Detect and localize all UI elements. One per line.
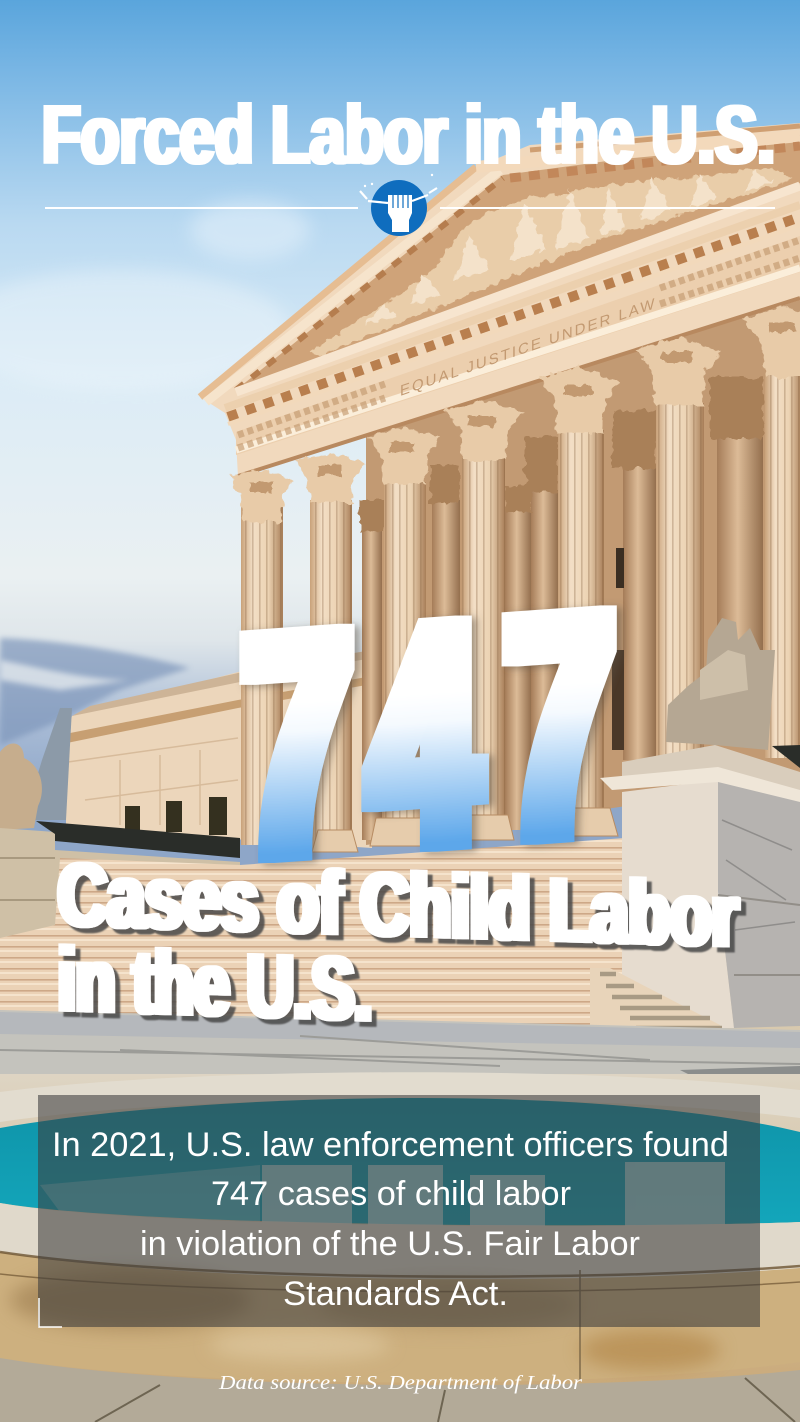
data source: Data source: U.S. Department of Labor xyxy=(218,1372,583,1394)
entablature with inscription: EQUAL JUSTICE UNDER LAW xyxy=(400,295,656,400)
pediment xyxy=(200,123,800,477)
panel body text: 747 cases of child labor xyxy=(211,1175,571,1213)
railing xyxy=(36,821,240,858)
background: sky with clouds xyxy=(0,0,800,900)
reflection of building xyxy=(40,1162,725,1227)
panel body text: Standards Act. xyxy=(283,1275,508,1313)
panel body text: In 2021, U.S. law enforcement officers found xyxy=(52,1126,729,1164)
back capitals xyxy=(360,377,763,532)
panel body text xyxy=(52,1126,729,1313)
big number 747: 747 xyxy=(245,547,611,922)
subtitle: in the U.S. xyxy=(58,930,372,1040)
plaza pavement xyxy=(0,1010,800,1102)
left wing xyxy=(60,650,372,848)
pediment figures xyxy=(310,168,792,356)
subtitle xyxy=(58,845,738,1040)
icon: raised fist breaking chain xyxy=(360,174,437,236)
fountain basin xyxy=(0,1072,800,1404)
column bases xyxy=(312,808,618,852)
title divider with icon xyxy=(45,174,775,236)
building: Supreme Court xyxy=(0,123,800,1036)
interior behind columns xyxy=(366,290,800,845)
raking cornice xyxy=(200,167,476,397)
scaffold xyxy=(24,708,72,820)
capitals xyxy=(229,307,800,522)
entablature with inscription xyxy=(236,236,800,476)
seated statue xyxy=(666,618,775,750)
ground paving xyxy=(0,1358,800,1422)
panel body text: in violation of the U.S. Fair Labor xyxy=(140,1225,640,1263)
panel corner marks xyxy=(39,1298,62,1327)
railing at right xyxy=(772,745,800,768)
stairs xyxy=(0,838,625,1032)
pool water xyxy=(0,1098,800,1225)
front columns xyxy=(229,307,800,852)
weathered stone xyxy=(0,1252,800,1383)
statue pedestal xyxy=(600,745,800,1028)
lower rim xyxy=(0,1203,800,1280)
left plinth and statue xyxy=(0,743,240,940)
horizontal cornice with dentils xyxy=(236,186,800,392)
back columns xyxy=(362,437,763,840)
side steps xyxy=(590,968,722,1036)
text panel xyxy=(38,1095,760,1327)
